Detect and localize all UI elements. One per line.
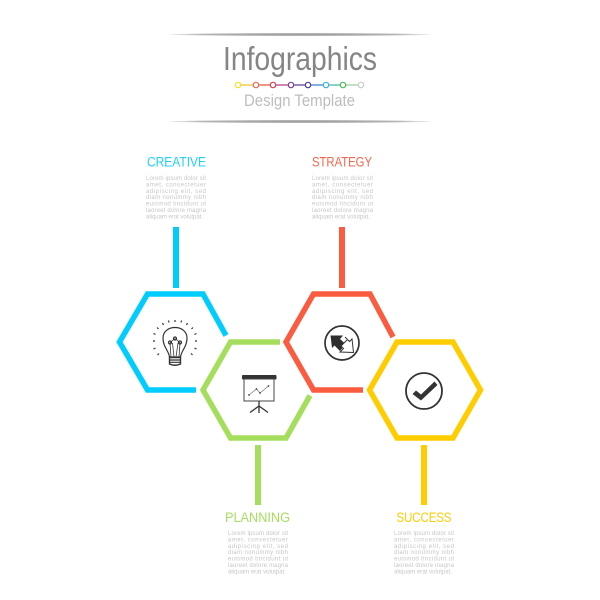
body: creative: amet, consectetuer <box>146 182 206 188</box>
icon: presentation board <box>242 375 276 413</box>
body: success: adipiscing elit, sed <box>394 544 454 550</box>
body: creative: aliquam erat volutpat. <box>146 214 203 220</box>
body: success: diam nonummy nibh <box>394 550 454 556</box>
body: planning <box>228 531 289 575</box>
connector: red <box>339 227 345 288</box>
body: strategy: amet, consectetuer <box>312 182 373 188</box>
body: strategy: adipiscing elit, sed <box>312 189 373 195</box>
body: strategy: aliquam erat volutpat. <box>312 214 370 220</box>
body: success: laoreet dolore magna <box>394 563 455 569</box>
body: planning: adipiscing elit, sed <box>228 544 288 550</box>
timeline dots <box>235 82 364 88</box>
body: strategy <box>312 176 374 220</box>
hexagon: green <box>203 342 310 438</box>
body: planning: diam nonummy nibh <box>228 550 288 556</box>
hexagon: blue <box>120 294 226 390</box>
heading: planning: PLANNING <box>225 510 290 525</box>
body: creative <box>146 176 207 220</box>
body: creative: euismod tincidunt ut <box>146 202 206 208</box>
body: success: euismod tincidunt ut <box>394 557 454 563</box>
icon: light bulb <box>153 320 197 365</box>
subtitle: Design Template <box>244 91 355 110</box>
body: success: amet, consectetuer <box>394 537 454 543</box>
panel: planning text <box>225 510 290 575</box>
panel: success text <box>394 510 455 575</box>
body: success: Lorem ipsum dolor sit <box>394 531 454 537</box>
connector: blue <box>173 227 179 288</box>
connector: yellow <box>421 445 427 505</box>
body: creative: diam nonummy nibh <box>146 195 206 201</box>
title: Infographics <box>223 40 377 77</box>
body: strategy: Lorem ipsum dolor sit <box>312 176 373 182</box>
body: success: aliquam erat volutpat. <box>394 569 452 575</box>
panel: creative text <box>146 154 207 220</box>
body: success <box>394 531 455 575</box>
body: creative: laoreet dolore magna <box>146 208 207 214</box>
connector: green <box>255 445 261 505</box>
body: strategy: diam nonummy nibh <box>312 195 373 201</box>
body: planning: laoreet dolore magna <box>228 563 289 569</box>
body: planning: euismod tincidunt ut <box>228 557 288 563</box>
body: planning: Lorem ipsum dolor sit <box>228 531 288 537</box>
body: strategy: laoreet dolore magna <box>312 208 374 214</box>
heading: creative: CREATIVE <box>147 154 206 170</box>
body: strategy: euismod tincidunt ut <box>312 202 373 208</box>
panel: strategy text <box>312 154 374 220</box>
hexagon: red <box>286 294 393 390</box>
body: creative: Lorem ipsum dolor sit <box>146 176 206 182</box>
icon: check mark in circle <box>406 373 442 409</box>
body: creative: adipiscing elit, sed <box>146 189 206 195</box>
icon: arrows in circle <box>325 326 359 360</box>
heading: strategy: STRATEGY <box>312 154 372 170</box>
body: planning: aliquam erat volutpat. <box>228 569 286 575</box>
title block <box>167 33 433 123</box>
hexagon: yellow <box>370 342 480 438</box>
body: planning: amet, consectetuer <box>228 537 288 543</box>
heading: success: SUCCESS <box>396 510 452 525</box>
